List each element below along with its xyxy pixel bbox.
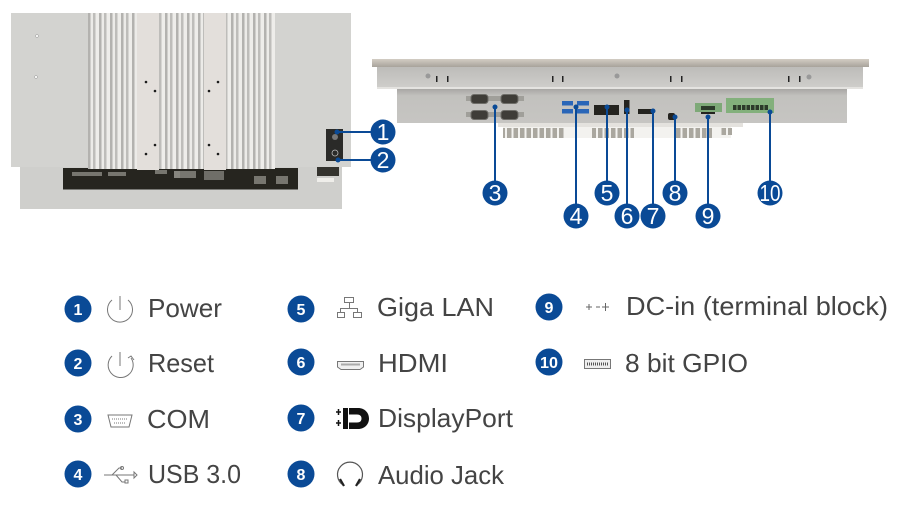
legend item: 8 bit GPIO [536,348,748,378]
ports: HDMI connector [624,100,630,114]
ports: COM connectors [466,94,524,120]
legend item: Power: Power [148,293,222,323]
legend item: Giga LAN: Giga LAN [377,292,494,322]
legend item: USB 3.0: USB 3.0 [148,459,241,489]
legend item: Audio Jack: Audio Jack [378,460,505,490]
ports: DC-in terminal block [695,103,722,114]
callout 5: 5 [601,180,613,206]
legend item: Audio Jack: 8 [297,467,306,484]
legend item: Giga LAN: 5 [297,302,306,319]
legend item: HDMI: HDMI [378,348,448,378]
legend item: DC-in (terminal block): DC-in (terminal block) [626,291,888,321]
callout 9 [696,114,720,229]
callout 10: 10 [760,180,780,206]
ports: audio jack [668,113,675,120]
callout 6: 6 [621,203,633,229]
legend item: COM [64,404,210,434]
legend item: Reset: Reset [148,348,215,378]
callout 8: 8 [669,180,681,206]
legend item: HDMI [288,348,448,378]
callout 1 [334,119,396,145]
legend item: DisplayPort: DisplayPort [378,403,514,433]
legend item: 8 bit GPIO: 8 bit GPIO [625,348,748,378]
legend item: Reset: 2 [74,356,83,373]
photo: bottom edge view of panel PC [372,59,869,138]
legend item: DC-in (terminal block): 9 [545,300,554,317]
legend item: USB 3.0 [64,459,241,489]
ports: GPIO terminal block [726,98,774,113]
legend item: COM: COM [147,404,210,434]
ports: DisplayPort connector [638,109,653,114]
legend item: COM: 3 [74,412,83,429]
callout 7: 7 [647,203,659,229]
callout 1: 1 [377,119,389,145]
callout 9: 9 [702,203,714,229]
callout 10 [758,110,782,206]
legend item: Power [64,293,222,323]
callout 4 [564,104,588,229]
legend item: DisplayPort: 7 [297,411,306,428]
legend item: HDMI: 6 [297,355,306,372]
callout 5 [594,104,620,206]
ports: LAN connectors [594,105,619,115]
legend item: Giga LAN [288,292,494,322]
legend item: Power: 1 [74,302,83,319]
legend item: USB 3.0: 4 [74,467,83,484]
legend item: Audio Jack [288,460,505,490]
callout 6 [614,108,640,229]
callout 8 [662,114,688,206]
callout 3: 3 [489,180,501,206]
legend item: DisplayPort [288,403,514,433]
callout 4: 4 [570,203,583,229]
legend item: 8 bit GPIO: 10 [540,355,558,372]
ports: USB connectors [562,101,589,114]
callout 2: 2 [377,147,389,173]
callout 3 [482,104,508,206]
photo: rear view of panel PC [11,13,351,209]
callout 7 [640,108,666,229]
legend item: Reset [64,348,215,378]
callout 2 [336,147,396,173]
